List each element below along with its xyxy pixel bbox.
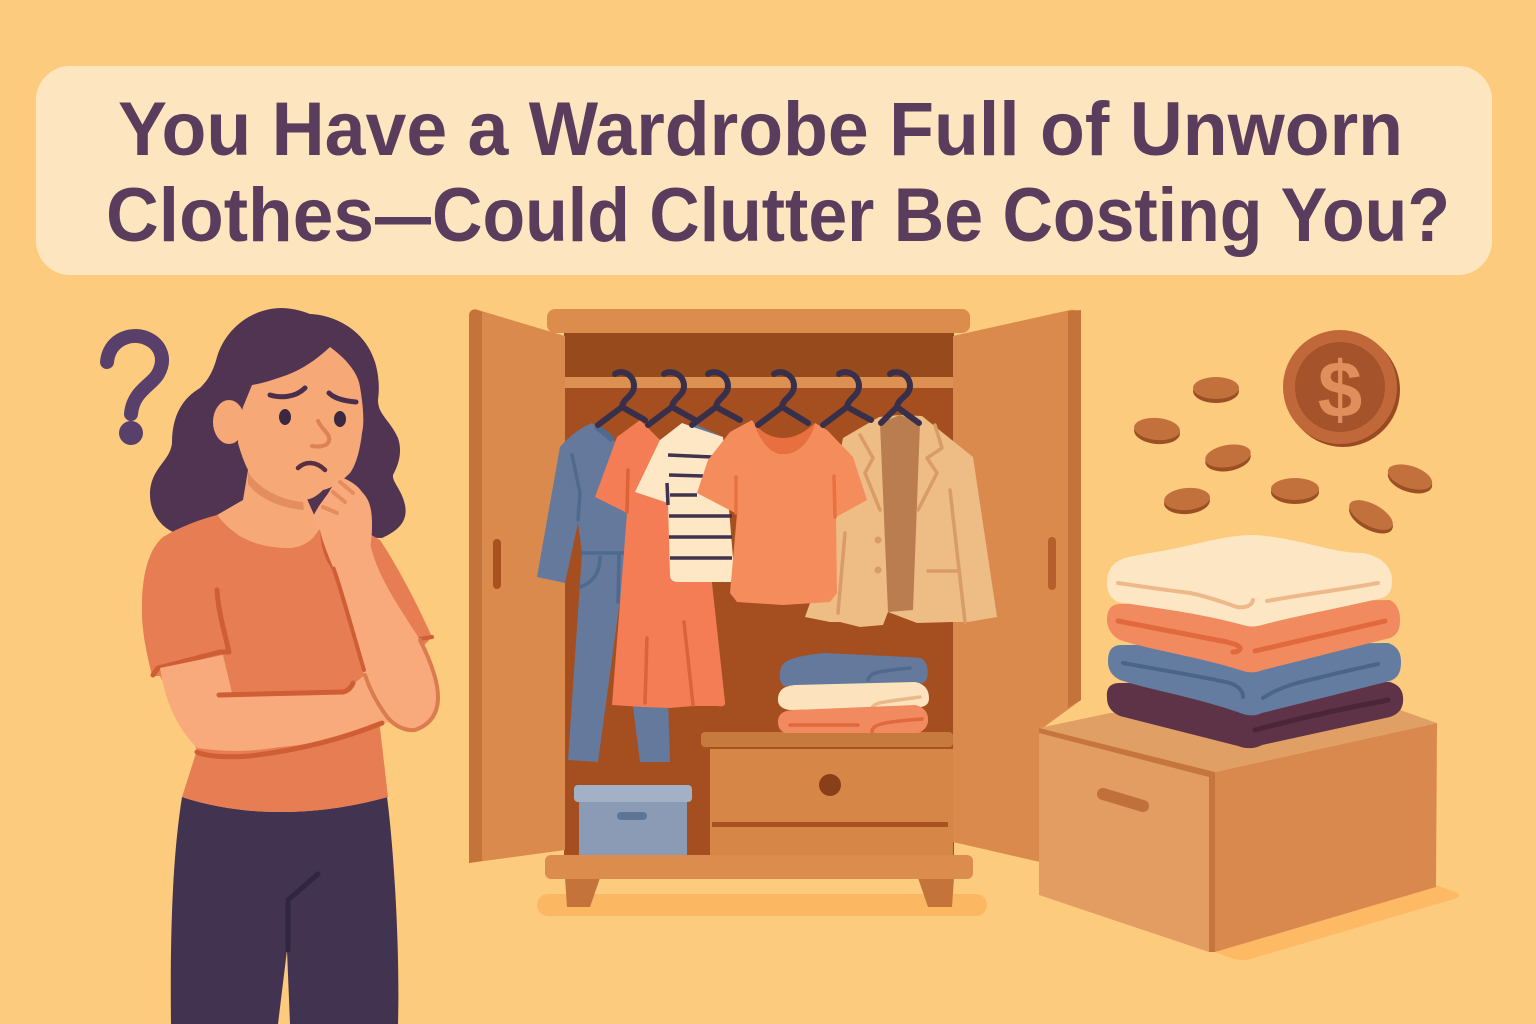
- cream layer: [1107, 535, 1392, 626]
- blue layer: [1108, 643, 1401, 715]
- folded clothes stack: [1107, 535, 1403, 748]
- eyebrows: [270, 388, 356, 402]
- nose and mouth: [312, 421, 329, 446]
- right door: [953, 310, 1081, 862]
- crossed arm: [160, 655, 392, 751]
- neck: [217, 470, 320, 548]
- box handle: [1103, 794, 1143, 806]
- shadow floor: [537, 894, 987, 916]
- storage box: [579, 798, 687, 855]
- icon: question mark: [107, 336, 162, 445]
- right sleeve hem: [420, 637, 432, 639]
- hangers: [598, 372, 919, 425]
- beige blazer: [805, 415, 997, 627]
- eyes: [279, 409, 291, 425]
- left door: [469, 309, 565, 863]
- blue jumpsuit: [537, 423, 670, 762]
- face: [238, 347, 363, 500]
- sleeve lines: [153, 590, 229, 675]
- shirt fold lines: [197, 683, 382, 757]
- ear: [213, 400, 245, 444]
- shirt: [142, 515, 432, 812]
- small folded stack: [780, 653, 928, 686]
- icon: dollar coin: [1283, 330, 1400, 447]
- box shadow: [1215, 885, 1459, 960]
- cardboard box: [1039, 710, 1459, 960]
- drawer: [701, 732, 953, 747]
- top cornice: [547, 309, 970, 333]
- title banner: Clothes: [106, 173, 374, 258]
- hand: [313, 477, 372, 567]
- raised forearm: [322, 530, 438, 730]
- title banner: Could Clutter Be Costing You?: [432, 173, 1450, 258]
- orange layer: [1107, 600, 1400, 672]
- orange t-shirt: [697, 420, 867, 605]
- icon: dollar coin: $: [1318, 345, 1362, 434]
- box top face: [1039, 710, 1437, 772]
- wardrobe body interior: [564, 330, 954, 860]
- trousers: [171, 797, 398, 1024]
- falling coins: [1133, 377, 1436, 540]
- feet: [565, 878, 600, 907]
- orange dress: [595, 420, 725, 708]
- title banner: You Have a Wardrobe Full of Unworn: [118, 87, 1403, 172]
- title banner: [36, 66, 1492, 275]
- box left face: [1039, 728, 1215, 952]
- rail: [564, 377, 954, 388]
- person: worried woman: [142, 308, 438, 1024]
- wardrobe: [469, 309, 1081, 916]
- title banner: —: [375, 173, 431, 258]
- striped shirt: [635, 423, 735, 582]
- hair: [150, 308, 406, 538]
- neck shadow: [248, 472, 304, 510]
- box right face: [1215, 723, 1437, 952]
- base: [545, 855, 973, 879]
- dark layer: [1107, 682, 1403, 748]
